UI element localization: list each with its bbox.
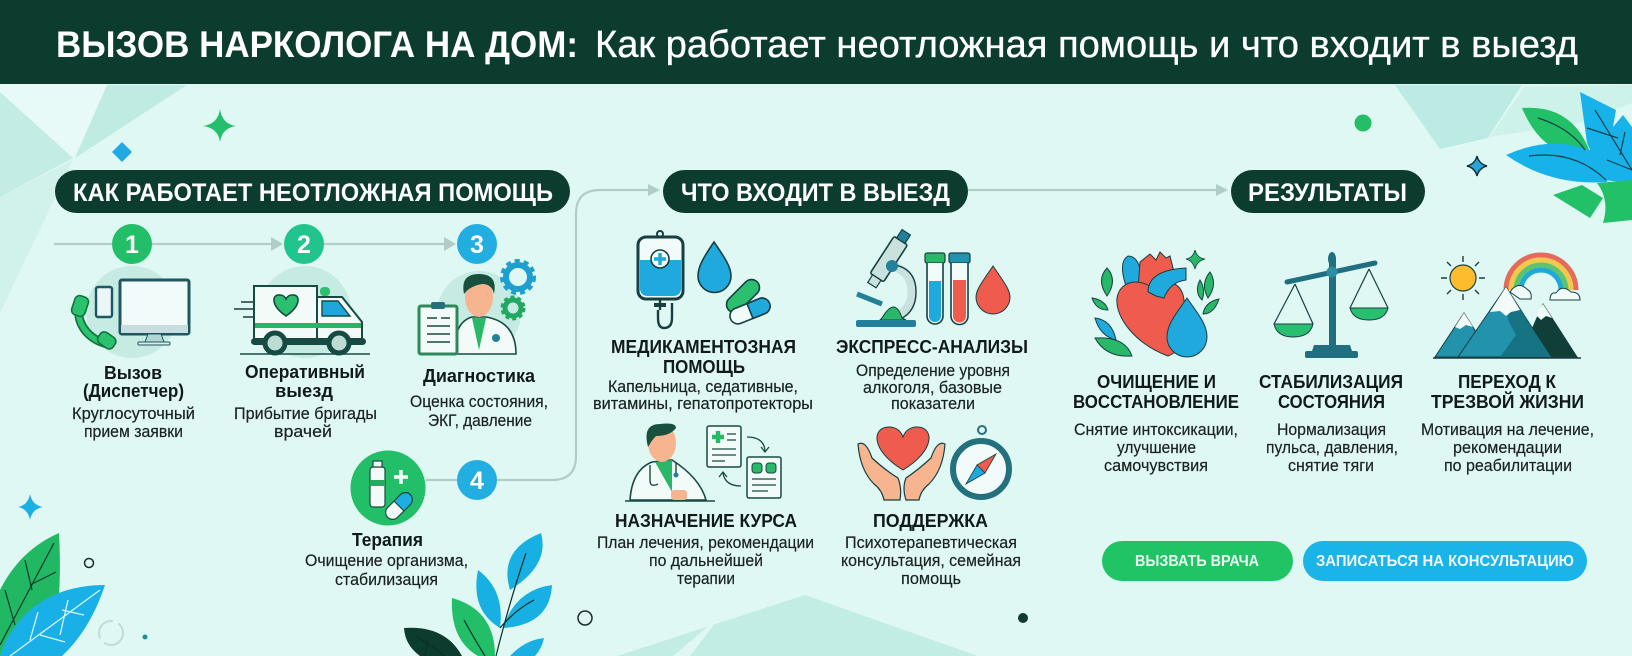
result: transition to sober life	[1421, 255, 1594, 475]
label: support: Психотерапевтическая	[845, 534, 1017, 552]
service: support	[841, 426, 1021, 588]
label: course prescription	[597, 510, 814, 588]
label: stabilization: снятие тяги	[1288, 457, 1374, 475]
step 3: diagnostics	[410, 224, 548, 430]
service: express tests	[836, 228, 1028, 413]
label: therapy	[305, 530, 468, 589]
label: transition to sober life: по реабилитации	[1444, 457, 1572, 475]
label: express tests: показатели	[891, 395, 975, 413]
label: support: консультация, семейная	[841, 552, 1021, 570]
heading: what is included	[663, 170, 968, 213]
number 2: 2	[297, 231, 311, 259]
label: therapy: Терапия	[352, 530, 423, 550]
button: call a doctor	[1102, 541, 1293, 581]
label: cleansing and recovery	[1073, 371, 1239, 475]
label: medication	[593, 336, 813, 413]
label: express tests: ЭКСПРЕСС-АНАЛИЗЫ	[836, 336, 1028, 357]
label: course prescription: План лечения, рекомендации	[597, 534, 814, 552]
decoration: small ring	[84, 558, 94, 568]
label: medication: витамины, гепатопротекторы	[593, 395, 813, 413]
label: diagnostics: ЭКГ, давление	[428, 412, 532, 430]
icon: sun, rainbow and mountains	[1433, 255, 1581, 358]
label: stabilization: пульса, давления,	[1266, 439, 1398, 457]
label: medication: ПОМОЩЬ	[663, 356, 745, 377]
icon: heart with drop and leaves	[1092, 250, 1219, 357]
decoration: plant	[404, 533, 552, 656]
step 2: departure	[234, 224, 377, 441]
label: departure: выезд	[275, 381, 334, 401]
label: support: помощь	[901, 570, 961, 588]
decoration: blue star	[18, 494, 43, 520]
icon: scales	[1274, 252, 1388, 358]
label: cleansing and recovery: ОЧИЩЕНИЕ И	[1097, 371, 1216, 392]
icon: bottle and capsule	[350, 450, 426, 526]
number 3	[457, 224, 497, 264]
decoration: top right leaves	[1506, 92, 1632, 223]
decoration: blue star	[1467, 156, 1487, 176]
arrow: services to results	[968, 184, 1228, 196]
arrow: timeline	[54, 237, 456, 251]
decoration: dark dot	[1018, 613, 1028, 623]
button: book a consultation: ЗАПИСАТЬСЯ НА КОНСУЛЬТАЦИЮ	[1316, 553, 1574, 570]
heading: what is included: ЧТО ВХОДИТ В ВЫЕЗД	[681, 179, 950, 207]
label: transition to sober life	[1421, 371, 1594, 475]
label: support: ПОДДЕРЖКА	[873, 510, 988, 531]
label: express tests	[836, 336, 1028, 413]
label: departure: врачей	[274, 423, 332, 441]
result: cleansing and recovery	[1073, 250, 1239, 475]
label: call: (Диспетчер)	[83, 381, 184, 401]
label: stabilization: Нормализация	[1277, 421, 1386, 439]
service: course prescription	[597, 424, 814, 588]
label: cleansing and recovery: самочувствия	[1104, 457, 1208, 475]
label: therapy: Очищение организма,	[305, 552, 468, 570]
decoration: teal dot	[142, 634, 148, 640]
icon: IV bag, drop and capsules	[638, 231, 772, 328]
heading: results: РЕЗУЛЬТАТЫ	[1248, 179, 1407, 207]
decoration: green dot	[1354, 114, 1372, 132]
label: departure: Прибытие бригады	[234, 405, 377, 423]
button: book a consultation	[1303, 541, 1587, 581]
result: stabilization	[1259, 252, 1403, 475]
number 1: 1	[125, 231, 139, 259]
label: diagnostics: Оценка состояния,	[410, 393, 548, 411]
decoration: bottom left leaves	[0, 533, 105, 656]
label: call	[72, 363, 195, 441]
label: stabilization: СОСТОЯНИЯ	[1278, 391, 1385, 412]
label: stabilization	[1259, 371, 1403, 475]
label: therapy: стабилизация	[335, 571, 438, 589]
number 2	[284, 224, 324, 264]
label: call: Вызов	[104, 363, 162, 383]
label: departure: Оперативный	[245, 362, 365, 382]
number 4	[457, 460, 497, 500]
number 4: 4	[470, 467, 484, 495]
heading: how it works	[55, 170, 570, 213]
service: medication	[593, 231, 813, 413]
label: diagnostics	[410, 366, 548, 430]
decoration: faint ring	[99, 621, 123, 645]
title: Как работает неотложная помощь и что входит в выезд	[595, 24, 1578, 66]
title	[56, 24, 1578, 66]
heading: how it works: КАК РАБОТАЕТ НЕОТЛОЖНАЯ ПОМОЩЬ	[73, 179, 553, 207]
label: cleansing and recovery: Снятие интоксикации,	[1074, 421, 1238, 439]
arrow: step 4 to included services	[426, 184, 660, 480]
label: medication: МЕДИКАМЕНТОЗНАЯ	[611, 336, 796, 357]
button: call a doctor: ВЫЗВАТЬ ВРАЧА	[1135, 553, 1259, 570]
step 1: call	[70, 224, 195, 441]
label: stabilization: СТАБИЛИЗАЦИЯ	[1259, 371, 1403, 392]
label: express tests: алкоголя, базовые	[863, 379, 1002, 397]
label: cleansing and recovery: ВОССТАНОВЛЕНИЕ	[1073, 391, 1239, 412]
heading: results	[1231, 170, 1425, 213]
label: course prescription: по дальнейшей	[649, 552, 763, 570]
icon: ambulance	[234, 266, 370, 358]
header band	[0, 0, 1632, 84]
label: call: Круглосуточный	[72, 405, 195, 423]
icon: doctor with documents	[625, 424, 781, 501]
decoration: blue diamond	[112, 142, 132, 162]
number 1	[112, 224, 152, 264]
label: call: прием заявки	[84, 423, 183, 441]
step 4: therapy	[305, 450, 497, 589]
label: support	[841, 510, 1021, 588]
icon: doctor with clipboard and gears	[419, 261, 534, 355]
label: medication: Капельница, седативные,	[608, 378, 798, 396]
label: transition to sober life: ПЕРЕХОД К	[1458, 371, 1557, 392]
label: course prescription: терапии	[677, 570, 735, 588]
label: departure	[234, 362, 377, 441]
label: cleansing and recovery: улучшение	[1117, 439, 1196, 457]
decoration: green star	[203, 109, 236, 142]
title: ВЫЗОВ НАРКОЛОГА НА ДОМ:	[56, 24, 578, 65]
label: express tests: Определение уровня	[856, 362, 1010, 380]
number 3: 3	[470, 231, 484, 259]
label: transition to sober life: Мотивация на лечение,	[1421, 421, 1594, 439]
label: transition to sober life: рекомендации	[1453, 439, 1562, 457]
icon: hands with heart and compass	[858, 426, 1009, 500]
label: diagnostics: Диагностика	[423, 366, 536, 386]
icon: microscope, test tubes and blood drop	[856, 228, 1010, 327]
decoration: ring	[578, 611, 592, 625]
label: transition to sober life: ТРЕЗВОЙ ЖИЗНИ	[1431, 391, 1584, 412]
label: course prescription: НАЗНАЧЕНИЕ КУРСА	[615, 510, 797, 531]
icon: phone and monitor	[70, 266, 189, 358]
